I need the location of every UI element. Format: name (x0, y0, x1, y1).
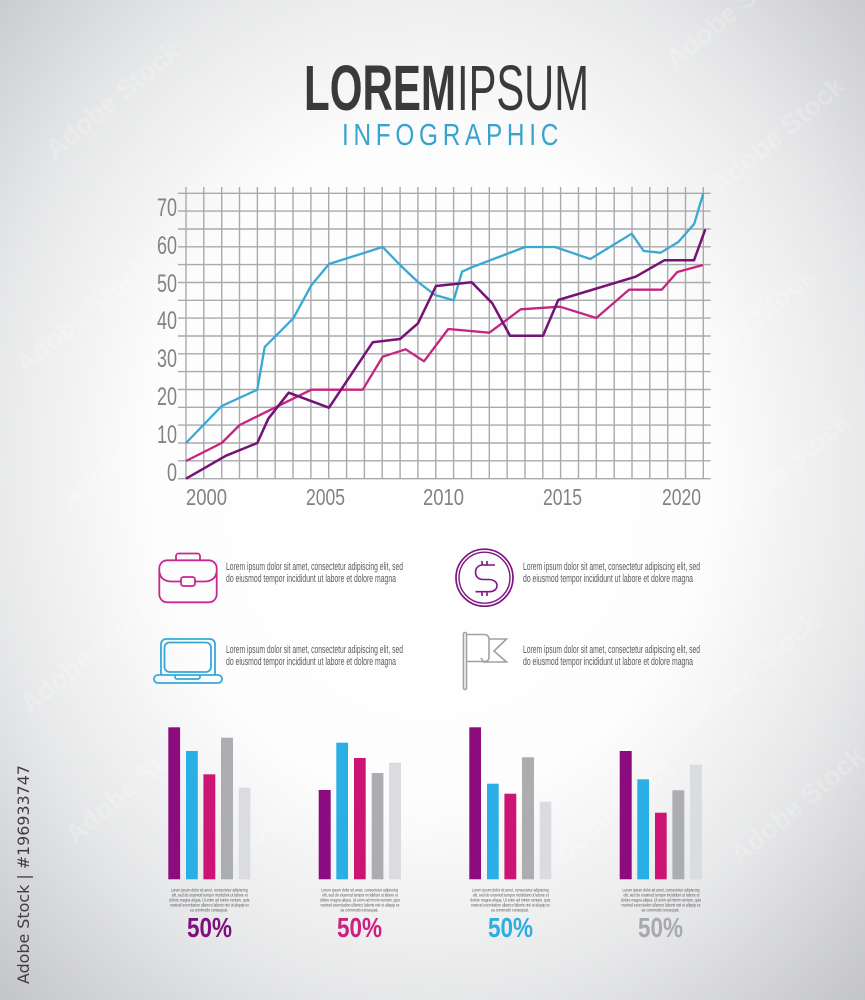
caption: nostrud exercitation ullamco laboris nisi ut aliquip ex (622, 902, 701, 908)
percent value: 50% (638, 912, 683, 943)
text block: do eiusmod tempor incididunt ut labore et dolore magna (523, 656, 694, 668)
caption: ea commodo consequat. (491, 908, 529, 914)
caption: Lorem ipsum dolor sit amet, consectetur adipiscing (321, 888, 398, 894)
percent value: 50% (337, 912, 382, 943)
caption: ea commodo consequat. (642, 908, 680, 914)
text block (226, 644, 403, 668)
caption: nostrud exercitation ullamco laboris nisi ut aliquip ex (471, 902, 550, 908)
watermark pattern: Adobe Stock (345, 600, 491, 730)
caption: Lorem ipsum dolor sit amet, consectetur adipiscing (472, 888, 549, 894)
text block: Lorem ipsum dolor sit amet, consectetur adipiscing elit, sed (523, 644, 700, 656)
info row: flag (464, 632, 700, 690)
watermark pattern: Adobe Stock (680, 605, 826, 735)
stock credit: Adobe Stock | #196933747 (14, 765, 33, 984)
caption: elit, sed do eiusmod tempor incididunt ut labore et (473, 892, 549, 898)
bars (620, 751, 702, 879)
watermark pattern: Adobe Stock (705, 70, 851, 200)
text block: do eiusmod tempor incididunt ut labore et dolore magna (523, 573, 694, 585)
watermark pattern: Adobe Stock (710, 405, 856, 535)
subtitle: INFOGRAPHIC (342, 117, 563, 152)
caption: elit, sed do eiusmod tempor incididunt ut labore et (322, 892, 399, 898)
info row: laptop (154, 639, 403, 683)
title: ipsum: IPSUM (457, 52, 589, 124)
text block (523, 561, 700, 585)
caption: elit, sed do eiusmod tempor incididunt ut labore et (624, 892, 700, 898)
bars (469, 727, 551, 879)
caption: dolore magna aliqua. Ut enim ad minim veniam, quis (320, 898, 400, 904)
watermark pattern: Adobe Stock (200, 755, 346, 885)
bar chart 1 (168, 727, 250, 943)
y axis labels: 70 (157, 194, 177, 222)
caption: nostrud exercitation ullamco laboris nisi ut aliquip ex (170, 902, 249, 908)
chart grid (178, 187, 711, 479)
watermark pattern: Adobe Stock (510, 430, 656, 560)
info row: briefcase (159, 554, 403, 602)
caption: dolore magna aliqua. Ut enim ad minim veniam, quis (169, 898, 250, 904)
x axis labels: 2005 (306, 484, 345, 510)
caption: Lorem ipsum dolor sit amet, consectetur adipiscing (171, 888, 248, 894)
y axis labels: 40 (157, 307, 177, 335)
y axis labels (157, 194, 177, 487)
caption: dolore magna aliqua. Ut enim ad minim veniam, quis (621, 898, 701, 904)
text block: do eiusmod tempor incididunt ut labore et dolore magna (226, 656, 397, 668)
x axis labels: 2010 (423, 484, 464, 510)
caption: dolore magna aliqua. Ut enim ad minim veniam, quis (470, 898, 551, 904)
y axis labels: 60 (157, 232, 177, 260)
watermark pattern: Adobe Stock (380, 395, 526, 525)
line chart (157, 187, 711, 510)
caption: ea commodo consequat. (340, 908, 378, 914)
percent value: 50% (488, 912, 533, 943)
y axis labels: 10 (157, 421, 177, 449)
text block (226, 561, 403, 585)
watermark pattern: Adobe Stock (40, 35, 186, 165)
text block: Lorem ipsum dolor sit amet, consectetur adipiscing elit, sed (226, 644, 403, 656)
caption (169, 888, 250, 914)
bars (168, 727, 250, 879)
text block (523, 644, 700, 668)
icon: dollar coin (456, 549, 513, 606)
watermark pattern: Adobe Stock (535, 750, 681, 880)
caption: nostrud exercitation ullamco laboris nisi ut aliquip ex (320, 902, 400, 908)
percent value: 50% (187, 912, 232, 943)
watermark pattern: Adobe Stock (510, 255, 656, 385)
watermark pattern: Adobe Stock (210, 220, 356, 350)
y axis labels: 50 (157, 270, 177, 298)
info row: dollar (456, 549, 700, 606)
y axis labels: 20 (157, 383, 177, 411)
title (304, 52, 589, 124)
title: lorem: LOREM (304, 52, 456, 124)
watermark pattern: Adobe Stock (55, 385, 201, 515)
blue line (186, 193, 703, 443)
watermark pattern: Adobe Stock (60, 720, 206, 850)
y axis labels: 30 (157, 345, 177, 373)
text block: do eiusmod tempor incididunt ut labore et dolore magna (226, 573, 397, 585)
purple line (186, 229, 705, 479)
icon: flag (464, 632, 506, 690)
watermark pattern: Adobe Stock (675, 260, 821, 390)
watermark pattern: Adobe Stock (190, 420, 336, 550)
bars (319, 743, 401, 879)
caption: elit, sed do eiusmod tempor incididunt ut labore et (172, 892, 248, 898)
caption (621, 888, 701, 914)
watermark pattern: Adobe Stock (370, 60, 516, 190)
bar chart 4 (620, 751, 702, 943)
text block: Lorem ipsum dolor sit amet, consectetur adipiscing elit, sed (226, 561, 403, 573)
text block: Lorem ipsum dolor sit amet, consectetur adipiscing elit, sed (523, 561, 700, 573)
caption: ea commodo consequat. (190, 908, 228, 914)
x axis labels: 2015 (543, 484, 582, 510)
magenta line (186, 265, 703, 461)
watermark pattern: Adobe Stock (10, 250, 156, 380)
caption (320, 888, 400, 914)
icon: laptop (154, 639, 222, 683)
caption (470, 888, 551, 914)
watermark pattern: Adobe Stock (550, 570, 696, 700)
caption: Lorem ipsum dolor sit amet, consectetur adipiscing (622, 888, 700, 894)
y axis labels: 0 (167, 459, 177, 487)
watermark pattern: Adobe Stock (390, 725, 536, 855)
watermark pattern: Adobe Stock (15, 590, 161, 720)
x axis labels: 2000 (186, 484, 227, 510)
bar chart 2 (319, 743, 401, 943)
x axis labels (186, 484, 701, 510)
x axis labels: 2020 (662, 484, 701, 510)
icon: briefcase (159, 554, 217, 602)
bar chart 3 (469, 727, 551, 943)
